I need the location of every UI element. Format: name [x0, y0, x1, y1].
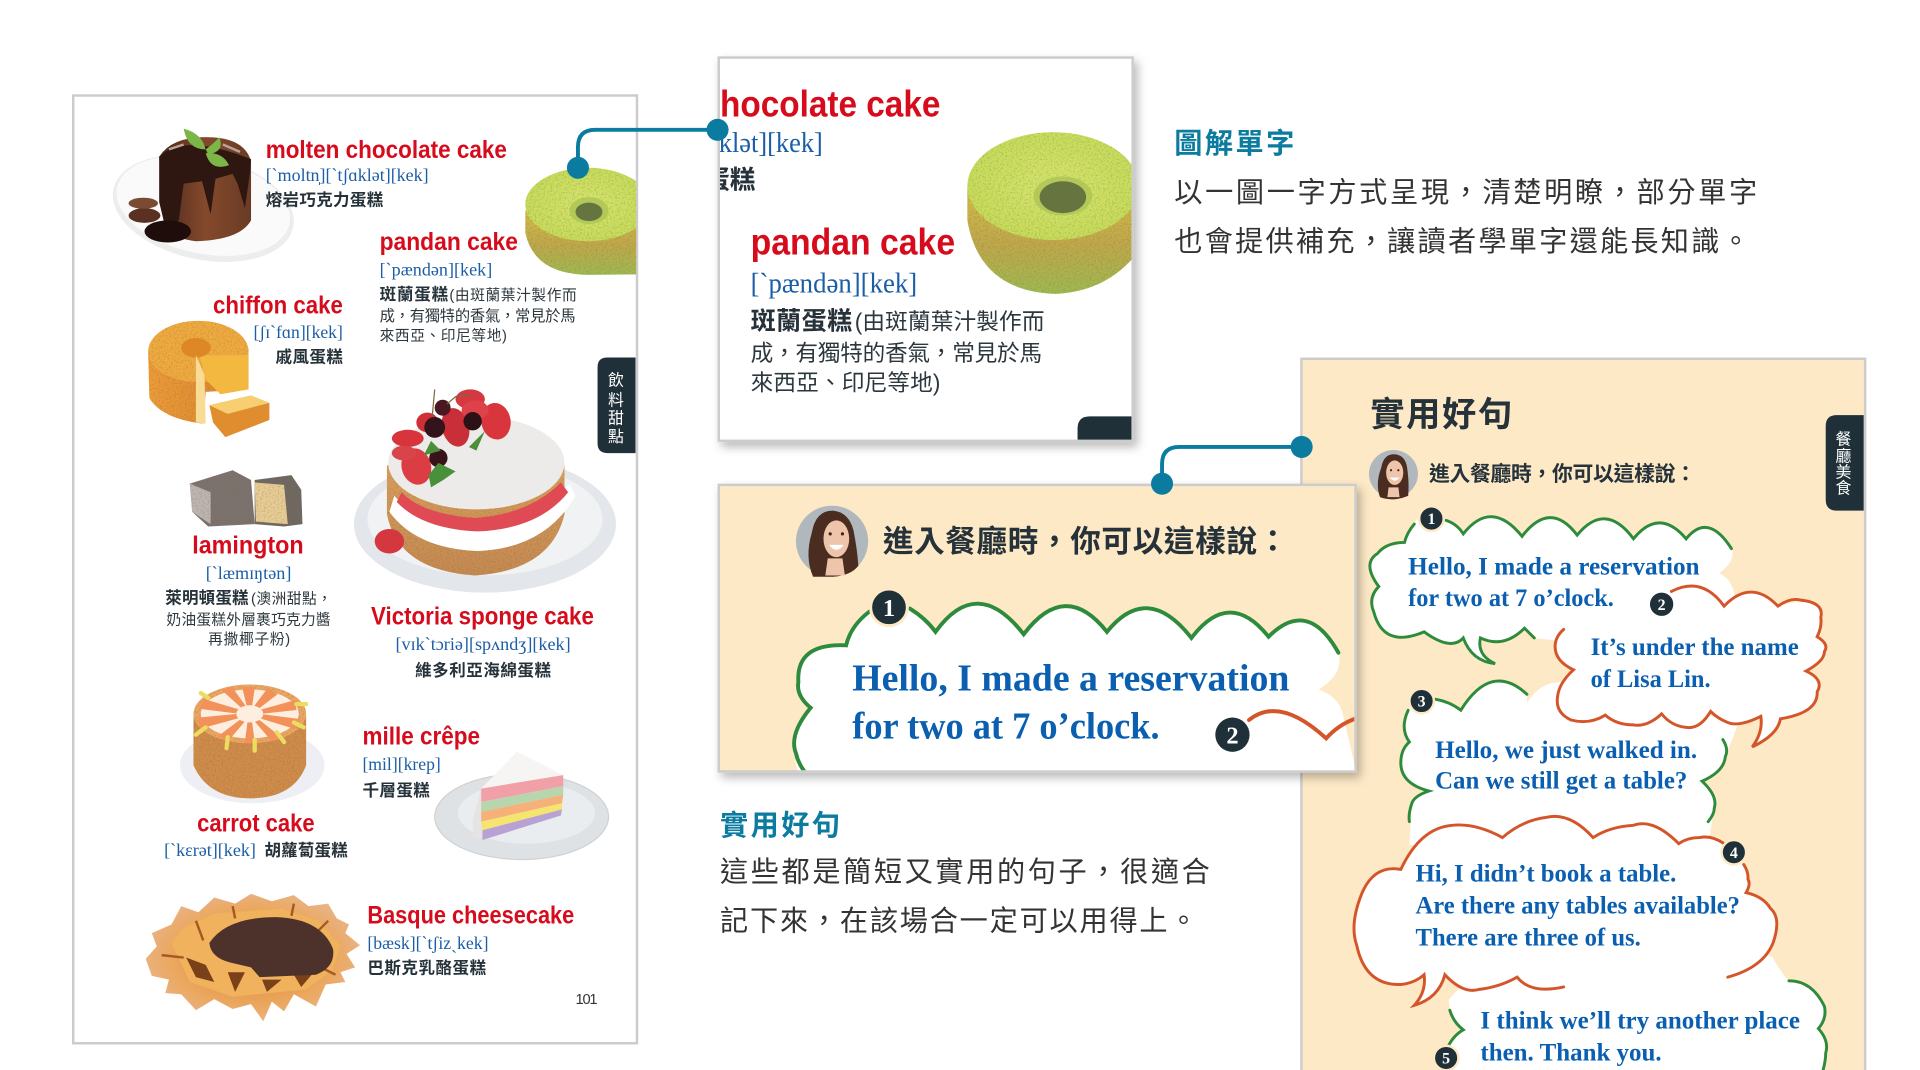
body: sentences line 1: 這些都是簡短又實用的句子，很適合 [720, 857, 1210, 888]
bubble text 4: There are three of us. [1416, 924, 1641, 951]
heading: illustrated vocabulary: 圖解單字 [1174, 128, 1294, 159]
number badge 3 [1409, 689, 1434, 713]
number badge 1 [1419, 506, 1444, 531]
image: pandan cake small [525, 168, 636, 275]
number badge 3: 3 [1418, 694, 1426, 711]
bubble text 2: of Lisa Lin. [1591, 666, 1711, 693]
bubble text 1: Hello, I made a reservation [1408, 553, 1700, 580]
bubble: large green [794, 599, 1359, 784]
description: pandan cake: (由斑蘭葉汁製作而 [449, 287, 577, 304]
heading: cropped chocolate cake: hocolate cake [720, 82, 940, 124]
phonetic: pandan cake large: [ˋpændən][kek] [751, 269, 917, 300]
description: pandan cake [380, 285, 577, 344]
bubble text 4: Hi, I didn’t book a table. [1416, 861, 1676, 888]
speech bubble 4 [1354, 816, 1777, 1005]
side tab: drinks and desserts: 飲 [608, 372, 624, 390]
bubble text 2 [1591, 634, 1799, 693]
panel: dictionary page [73, 96, 650, 1043]
heading: Basque cheesecake: Basque cheesecake [367, 901, 574, 929]
translation: Victoria sponge cake: 維多利亞海綿蛋糕 [415, 660, 551, 680]
text block: sentence explanation [720, 810, 1210, 937]
image: lamington [190, 470, 302, 527]
number badge 1: 1 [1427, 511, 1435, 528]
heading: mille crêpe: mille crêpe [362, 722, 480, 750]
panel: practical sentences page [1301, 359, 1865, 1070]
prompt text: 進入餐廳時，你可以這樣說： [1429, 462, 1696, 486]
phonetic and translation: carrot cake: [ˋkɛrət][kek] [164, 840, 256, 860]
avatar: woman [1369, 450, 1418, 499]
heading: pandan cake large: pandan cake [751, 221, 955, 263]
heading: carrot cake: carrot cake [197, 809, 315, 837]
translation: chiffon cake: 戚風蛋糕 [276, 347, 343, 366]
image: chiffon cake [148, 321, 269, 437]
phonetic: lamington: [ˋlæmɪŋtən] [206, 563, 291, 583]
bubble text large: for two at 7 o’clock. [852, 705, 1160, 747]
number badge 1 large: 1 [883, 595, 895, 622]
number badge 1 large [871, 589, 907, 626]
body: vocabulary line 2: 也會提供補充，讓讀者學單字還能長知識。 [1174, 226, 1750, 257]
phonetic and translation: carrot cake [164, 840, 348, 860]
translation: Basque cheesecake: 巴斯克乳酪蛋糕 [367, 957, 487, 977]
description: pandan cake: 斑蘭蛋糕 [380, 285, 449, 304]
bubble text 3: Can we still get a table? [1435, 768, 1687, 795]
side tab: drinks and desserts: 料 [608, 391, 624, 409]
side tab: drinks and desserts [598, 358, 636, 453]
speech bubble 2 [1408, 553, 1827, 747]
description: pandan cake large: 成，有獨特的香氣，常見於馬 [751, 340, 1042, 366]
image: carrot cake [180, 684, 324, 803]
speech bubble 1 [1370, 506, 1735, 664]
heading: Victoria sponge cake: Victoria sponge cake [371, 602, 594, 630]
panel: enlarged sentence detail [719, 485, 1359, 784]
page number: 101 [576, 992, 598, 1008]
heading: lamington: lamington [192, 531, 304, 559]
side tab: restaurant food [1826, 415, 1864, 511]
phonetic: cropped: klət][kek] [719, 128, 823, 159]
side tab: restaurant food: 廳 [1836, 447, 1852, 466]
description: pandan cake: 成，有獨特的香氣，常見於馬 [380, 308, 576, 325]
connector arrow: sentence page to enlarged detail [1162, 436, 1313, 484]
description: pandan cake large: (由斑蘭葉汁製作而 [855, 308, 1044, 334]
heading: practical sentences: 實用好句 [720, 810, 840, 841]
description: lamington: 奶油蛋糕外層裹巧克力醬 [167, 611, 331, 628]
number badge 5: 5 [1442, 1050, 1450, 1067]
number badge 2: 2 [1658, 597, 1666, 614]
bubble text 2: It’s under the name [1591, 634, 1799, 661]
phonetic: molten chocolate cake: [ˋmoltn̩][ˋtʃɑklət][kek] [266, 165, 429, 185]
bubble text large [852, 658, 1289, 747]
speech bubble 5 [1434, 955, 1827, 1070]
image: Victoria sponge cake [354, 389, 616, 593]
phonetic: Basque cheesecake: [bæsk][ˋtʃizˏkek] [367, 933, 489, 953]
description: lamington: 再撒椰子粉) [208, 631, 290, 648]
description: lamington [165, 589, 332, 648]
heading: chiffon cake: chiffon cake [213, 291, 343, 319]
number badge 2 [1649, 592, 1674, 617]
heading: molten chocolate cake: molten chocolate cake [266, 136, 507, 164]
bubble text 4: Are there any tables available? [1416, 892, 1740, 919]
number badge 2 large: 2 [1226, 722, 1239, 749]
bubble text 5 [1480, 1008, 1800, 1066]
translation: cropped: 蛋糕 [704, 166, 756, 195]
description: lamington: (澳洲甜點， [251, 591, 332, 608]
phonetic: Victoria sponge cake: [vɪkˋtɔriə][spʌndʒ][kek] [396, 634, 571, 654]
connector dot: detail endpoint [707, 119, 729, 141]
image: mille crepe [435, 752, 609, 860]
translation: mille crêpe: 千層蛋糕 [362, 781, 430, 800]
side tab: restaurant food: 食 [1836, 479, 1852, 497]
number badge 2 large [1215, 718, 1250, 752]
heading: pandan cake: pandan cake [380, 228, 518, 256]
text block: vocabulary explanation [1174, 128, 1757, 257]
number badge 4 [1722, 840, 1746, 864]
side tab: cropped [1078, 416, 1133, 441]
phonetic: pandan cake: [ˋpændən][kek] [380, 260, 492, 280]
bubble text 1: for two at 7 o’clock. [1408, 585, 1614, 612]
side tab: restaurant food: 美 [1836, 464, 1852, 482]
bubble text 3 [1435, 737, 1697, 795]
side tab: restaurant food: 餐 [1836, 430, 1852, 448]
translation: molten chocolate cake: 熔岩巧克力蛋糕 [266, 191, 384, 210]
image: pandan cake large [967, 132, 1139, 294]
description: lamington: 萊明頓蛋糕 [165, 589, 249, 608]
phonetic and translation: carrot cake: 胡蘿蔔蛋糕 [264, 841, 348, 860]
connector arrow: page to enlarged detail [567, 130, 719, 179]
bubble text large: Hello, I made a reservation [852, 658, 1289, 700]
description: pandan cake: 來西亞、印尼等地) [380, 326, 507, 344]
bubble text 4 [1416, 861, 1740, 951]
body: vocabulary line 1: 以一圖一字方式呈現，清楚明瞭，部分單字 [1174, 177, 1757, 208]
speech bubble 3 [1401, 681, 1739, 845]
panel: enlarged vocabulary detail [704, 58, 1139, 441]
bubble text 5: I think we’ll try another place [1480, 1008, 1800, 1035]
side tab: drinks and desserts: 甜 [608, 410, 624, 428]
bubble text 3: Hello, we just walked in. [1435, 737, 1697, 764]
connector dot: enlarged detail top [1151, 473, 1173, 495]
prompt text large: 進入餐廳時，你可以這樣說： [883, 524, 1288, 559]
side tab: drinks and desserts: 點 [608, 428, 624, 446]
description: pandan cake large: 來西亞、印尼等地) [751, 370, 940, 396]
phonetic: chiffon cake: [ʃɪˋfɑn][kek] [253, 322, 343, 342]
bubble text 1 [1408, 553, 1700, 612]
heading: practical sentences: 實用好句 [1370, 396, 1512, 434]
avatar: woman large [796, 506, 868, 577]
image: Basque cheesecake [146, 894, 360, 1021]
phonetic: mille crêpe: [mil][krep] [362, 754, 441, 774]
description: pandan cake large [751, 307, 1044, 396]
description: pandan cake large: 斑蘭蛋糕 [751, 307, 852, 335]
image: molten chocolate cake [103, 129, 304, 278]
bubble text 5: then. Thank you. [1480, 1039, 1662, 1066]
body: sentences line 2: 記下來，在該場合一定可以用得上。 [720, 906, 1198, 937]
number badge 4: 4 [1730, 845, 1738, 862]
number badge 5 [1434, 1046, 1458, 1070]
